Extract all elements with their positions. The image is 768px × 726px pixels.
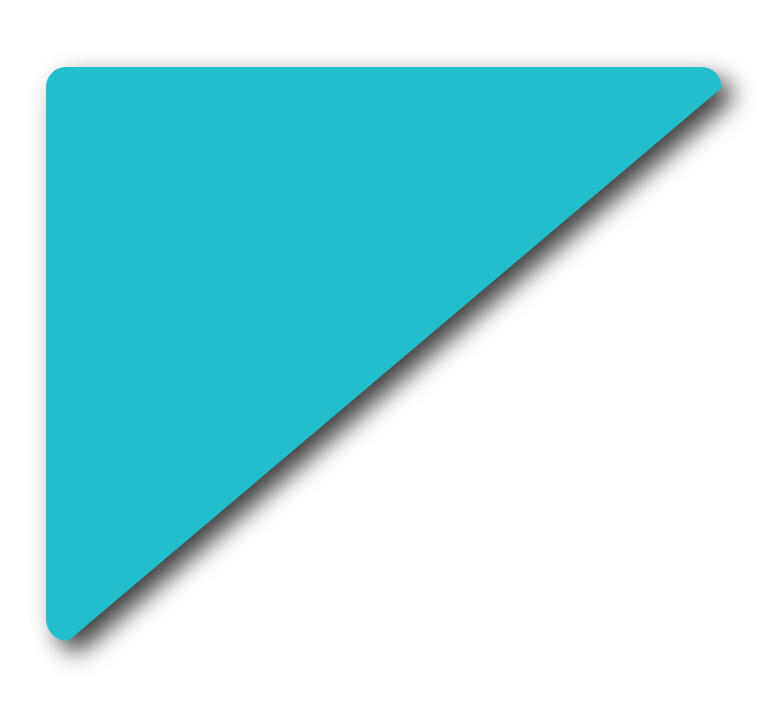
triangle shape and shadow [46, 67, 733, 652]
